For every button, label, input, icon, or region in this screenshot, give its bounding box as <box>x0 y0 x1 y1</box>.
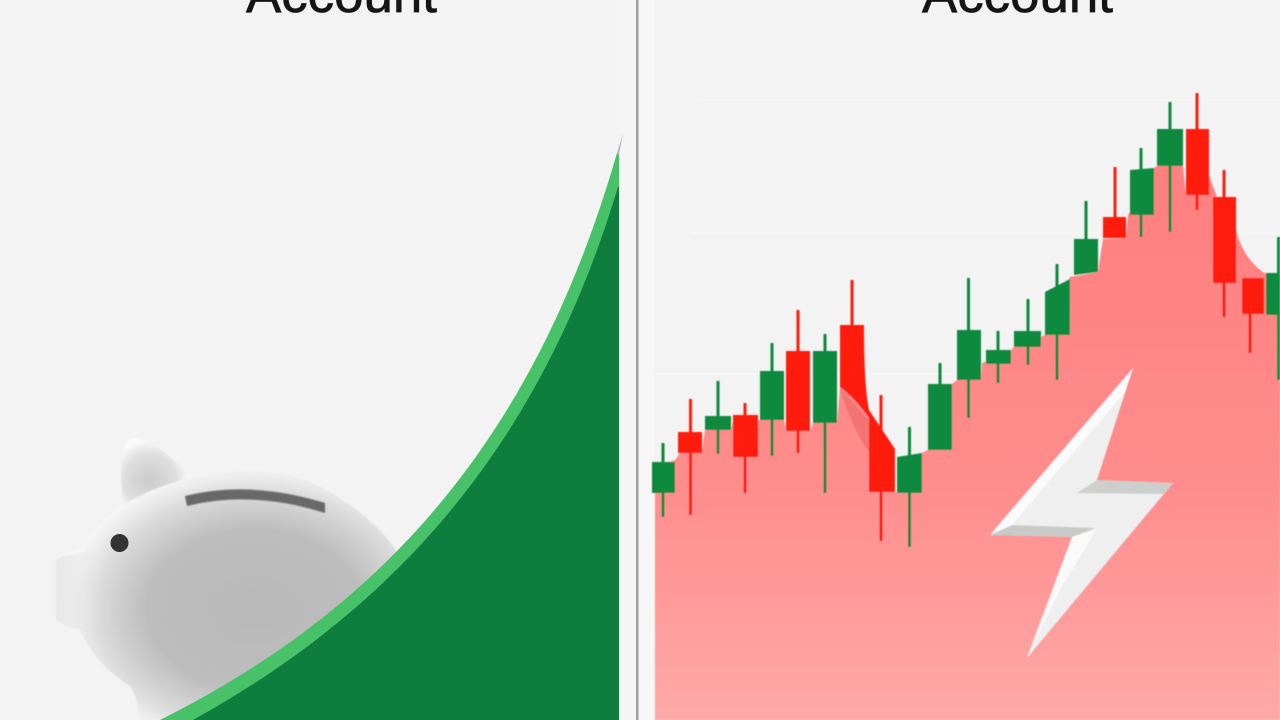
divider line <box>636 0 638 720</box>
candle 1 <box>652 443 675 517</box>
candle 16 <box>1074 201 1098 275</box>
bolt face <box>990 368 1173 658</box>
candle 8 and 9: falling red pair <box>840 280 895 541</box>
candle 10 <box>897 427 922 547</box>
red area under candles <box>655 166 1280 720</box>
candle 19 <box>1157 102 1183 232</box>
candle 23 <box>1266 237 1280 380</box>
candle 4 <box>733 403 758 493</box>
candle 5 <box>760 343 784 456</box>
pig ear <box>121 438 191 505</box>
growth curve chart <box>160 133 623 720</box>
icon: piggy bank <box>56 438 420 720</box>
bolt upper shaded step <box>1077 480 1173 494</box>
bolt lower highlight <box>1027 530 1096 658</box>
candle 20 <box>1186 93 1209 210</box>
pig coin slot <box>185 489 325 513</box>
candle 13 <box>986 331 1011 383</box>
candle 7 <box>813 334 837 493</box>
candle 14 <box>1014 299 1041 365</box>
pig snout <box>56 552 100 629</box>
pig body <box>56 470 420 720</box>
candlestick area chart <box>652 93 1280 720</box>
icon: lightning bolt <box>990 368 1173 658</box>
candle 17 <box>1103 167 1126 238</box>
bolt upper highlight <box>990 368 1133 535</box>
curve highlight band <box>160 153 619 720</box>
curve dark fill <box>193 187 619 720</box>
candle 22 <box>1242 278 1264 353</box>
pig eye <box>110 534 128 552</box>
candle 18 <box>1130 148 1154 237</box>
candle 6 <box>786 310 810 453</box>
candle 3 <box>705 381 731 454</box>
candle 12 <box>957 278 981 418</box>
candle 15 <box>1045 264 1070 380</box>
curve tip <box>617 133 623 155</box>
candle 2 <box>678 399 702 515</box>
area shadow wedge <box>840 388 869 452</box>
bolt lower shaded step <box>990 525 1095 537</box>
candle 11 <box>928 363 952 450</box>
candle 21 <box>1213 170 1236 317</box>
